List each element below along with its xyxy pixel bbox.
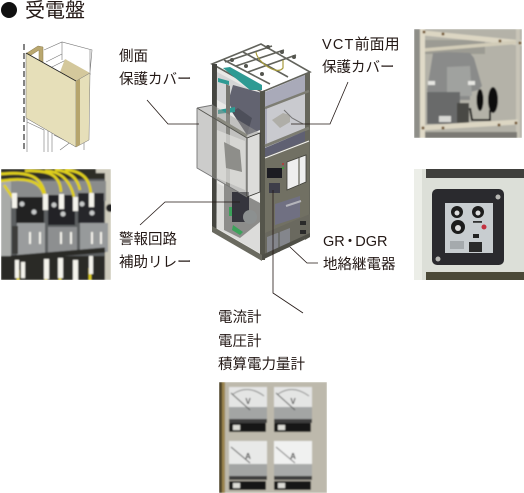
- photo: meters: A: [245, 452, 251, 461]
- leader line: VCT cover: [291, 82, 348, 124]
- label: GR DGR ground relay: [323, 234, 396, 273]
- bullet icon: [1, 2, 17, 18]
- lower left interior: [217, 183, 260, 253]
- photo: meters: V: [290, 397, 296, 406]
- hopper: [228, 85, 262, 135]
- label: alarm circuit auxiliary relay: 警報回路: [119, 232, 177, 248]
- leader line: meters: [273, 190, 303, 313]
- photo: meters: A: [290, 452, 296, 461]
- photo: auxiliary relays: [1, 169, 114, 280]
- label: meters: 積算電力量計: [218, 357, 305, 373]
- label: side protective cover: 側面: [119, 49, 148, 65]
- label: side protective cover: 保護カバー: [119, 72, 192, 88]
- frame posts: [212, 64, 217, 230]
- label: meters: 電圧計: [218, 334, 262, 350]
- title: 受電盤: [25, 0, 85, 22]
- label: VCT front protective cover: 保護カバー: [322, 60, 394, 76]
- label: side protective cover: [119, 48, 192, 88]
- left interior: [212, 64, 262, 260]
- label: alarm circuit auxiliary relay: [119, 231, 192, 271]
- cubicle 3D illustration: [197, 44, 310, 261]
- lower right front panel: [265, 140, 309, 236]
- teal bus bars: [223, 67, 262, 90]
- photo: GR/DGR ground relay: [414, 169, 524, 280]
- label: alarm circuit auxiliary relay: 補助リレー: [119, 255, 192, 271]
- top rails: [212, 44, 310, 92]
- illustration: side protective cover: [24, 42, 92, 152]
- label: GR DGR ground relay: GR・DGR: [323, 234, 387, 250]
- label: VCT front protective cover: [322, 36, 400, 76]
- leader line: auxiliary relay: [140, 202, 240, 225]
- label: meters: 電流計: [218, 310, 262, 326]
- label: VCT front protective cover: VCT前面用: [322, 36, 400, 53]
- leader line: side cover: [147, 100, 199, 124]
- leader line: ground relay: [290, 247, 318, 263]
- photo: VCT front protective cover: [414, 29, 522, 138]
- photo: meters: V: [245, 397, 251, 406]
- transparent side cover: [197, 105, 260, 197]
- label: meters: [218, 309, 305, 373]
- label: GR DGR ground relay: 地絡継電器: [323, 257, 396, 273]
- photo: meters: [219, 382, 327, 493]
- upper right section: [265, 75, 305, 148]
